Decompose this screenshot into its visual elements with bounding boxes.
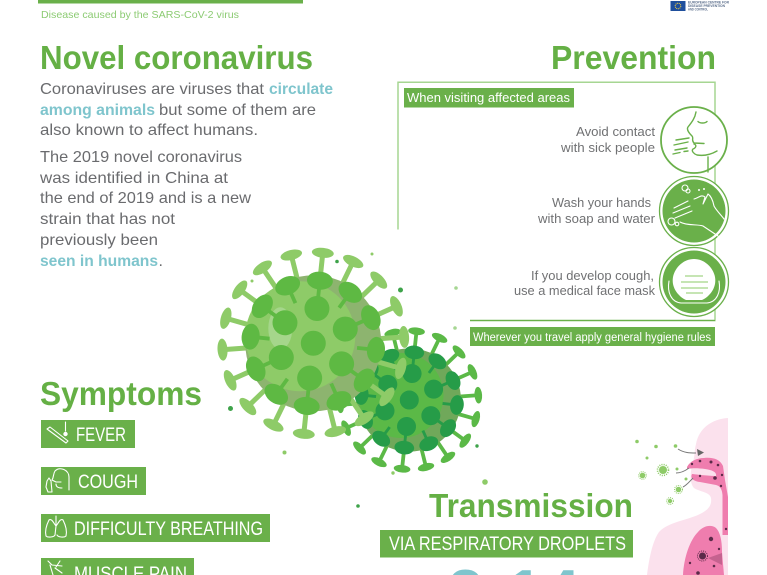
arrow: breathing in droplets	[676, 449, 704, 487]
floating droplets	[228, 252, 488, 508]
text: face mask: use a medical face mask	[514, 284, 656, 298]
text: face mask: If you develop cough,	[531, 269, 654, 283]
text: avoid contact: with sick people	[560, 141, 655, 155]
top title bar	[38, 0, 303, 4]
icon: muscle pain figure	[48, 561, 62, 575]
symptom: cough: COUGH	[78, 472, 138, 493]
label: via respiratory droplets: VIA RESPIRATORY DROPLETS	[389, 534, 626, 555]
text: wash your hands	[537, 196, 655, 226]
label: when visiting affected areas	[404, 88, 574, 108]
heading: Prevention: Prevention	[551, 39, 716, 76]
icon: thermometer	[47, 422, 68, 443]
heading: Symptoms: Symptoms	[40, 375, 202, 412]
icon: person avoiding sneeze	[661, 107, 727, 173]
icon: washing hands	[660, 176, 728, 246]
virus particles in the body	[689, 460, 727, 575]
text block: 2019 novel coronavirus: the end of 2019 and is a new	[40, 190, 251, 207]
text block: 2019 novel coronavirus: strain that has not	[40, 211, 176, 228]
droplets	[635, 440, 688, 504]
text block: coronavirus intro: also known to affect humans.	[40, 122, 258, 139]
text block: 2019 novel coronavirus: The 2019 novel coronavirus	[40, 149, 242, 166]
symptom: muscle pain	[41, 558, 194, 575]
text block: coronavirus intro: Coronaviruses are viruses that	[40, 81, 265, 98]
lung	[683, 526, 724, 575]
text: wash your hands: Wash your hands	[552, 196, 651, 210]
airway	[687, 458, 728, 535]
label: when visiting affected areas: When visiting affected areas	[407, 91, 570, 105]
icon: lungs	[46, 516, 66, 537]
text block: coronavirus intro: but some of them are	[159, 102, 316, 119]
illustration: respiratory system	[635, 418, 728, 575]
text block: 2019 novel coronavirus: seen in humans	[40, 253, 158, 270]
symptom: difficulty breathing	[41, 514, 270, 542]
text: avoid contact	[560, 125, 656, 155]
symptom: cough	[41, 467, 146, 495]
text: face mask	[514, 269, 656, 298]
icon: medical face mask	[660, 248, 728, 316]
logo: ECDC: EUROPEAN CENTRE FOR	[688, 1, 730, 5]
subtitle: Disease caused by the SARS-CoV-2 virus	[41, 9, 239, 21]
text block: 2019 novel coronavirus: .	[158, 253, 163, 270]
lung shadow	[708, 553, 722, 565]
prevention frame	[398, 82, 715, 320]
text block: coronavirus intro: among animals	[40, 102, 155, 119]
symptom: difficulty breathing: DIFFICULTY BREATHING	[74, 519, 263, 540]
text block: 2019 novel coronavirus	[39, 149, 251, 270]
logo: ECDC: DISEASE PREVENTION	[688, 4, 726, 8]
heading: Transmission: Transmission	[429, 487, 633, 524]
logo: ECDC	[670, 1, 730, 11]
logo: ECDC: AND CONTROL	[688, 7, 708, 11]
heading: Novel coronavirus: Novel coronavirus	[40, 39, 313, 76]
symptom: fever	[41, 420, 135, 448]
text: avoid contact: Avoid contact	[576, 125, 656, 139]
small virus	[336, 327, 483, 473]
text block: coronavirus intro	[40, 81, 333, 139]
label: via respiratory droplets	[380, 530, 633, 558]
large virus	[217, 247, 410, 440]
icon: coughing head	[46, 469, 69, 492]
body silhouette	[647, 418, 728, 575]
label: general hygiene rules	[470, 327, 715, 346]
text block: 2019 novel coronavirus: previously been	[40, 232, 158, 249]
symptom: fever: FEVER	[76, 425, 126, 446]
label: general hygiene rules: Wherever you travel apply general hygiene rules	[473, 332, 711, 344]
prevention frame bottom line	[470, 320, 715, 322]
text block: coronavirus intro: circulate	[269, 81, 333, 98]
text: wash your hands: with soap and water	[537, 212, 655, 226]
text block: 2019 novel coronavirus: was identified in China at	[39, 170, 229, 187]
